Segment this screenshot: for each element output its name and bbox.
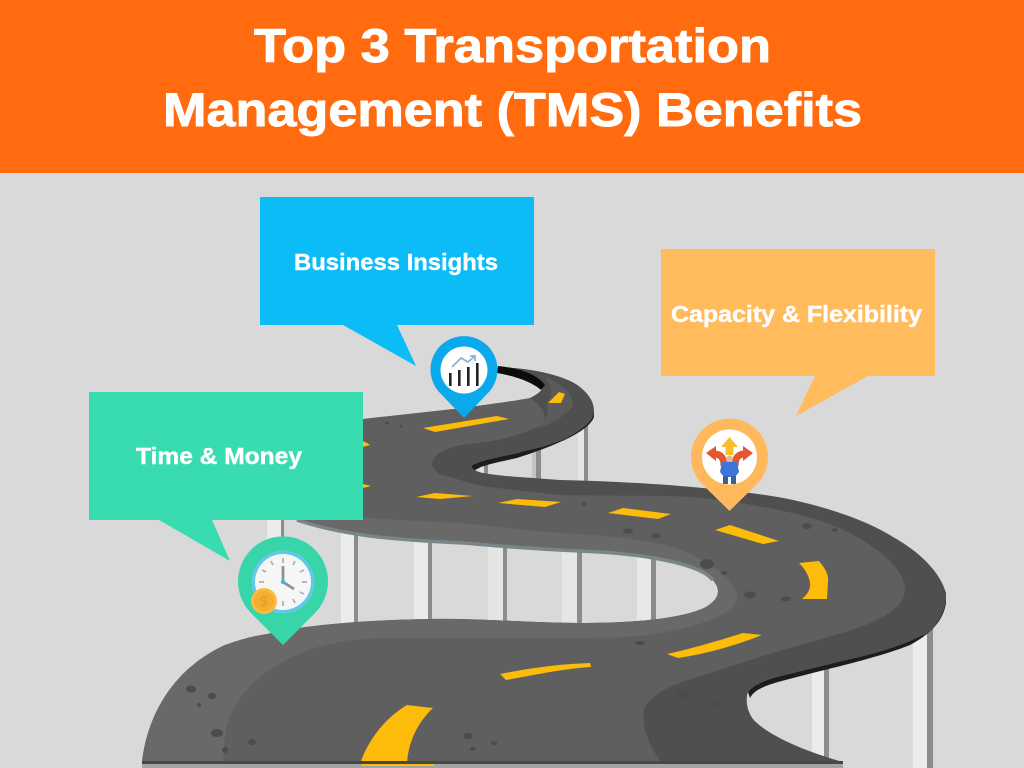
road base lower strip <box>142 764 843 768</box>
title: Management (TMS) Benefits <box>163 83 862 136</box>
light road rim <box>142 517 737 761</box>
road surface, dark shoulder <box>142 367 946 762</box>
road underside shadow <box>471 411 946 698</box>
callout: Time & Money: Time & Money <box>136 443 302 469</box>
road surface speckles <box>186 422 838 753</box>
pin: time and money clock: $ <box>260 593 268 609</box>
pin: capacity and flexibility <box>691 419 768 511</box>
title <box>163 19 862 136</box>
yellow lane markings <box>360 392 828 768</box>
winding road <box>130 366 946 768</box>
callout: Time & Money <box>89 392 363 561</box>
pin: time and money clock <box>238 536 328 645</box>
lobe highlight <box>538 377 573 428</box>
road base edge <box>142 761 843 764</box>
callout: Capacity & Flexibility <box>661 249 935 416</box>
road support pillars <box>267 420 933 768</box>
callout: Business Insights: Business Insights <box>294 249 498 275</box>
inner black edge of lobe <box>497 366 545 390</box>
lane marking under base <box>362 764 434 766</box>
road centre surface <box>224 398 905 765</box>
title: Top 3 Transportation <box>254 19 771 72</box>
hole edge highlight <box>297 520 713 580</box>
callout: Business Insights <box>260 197 534 366</box>
callout: Capacity & Flexibility: Capacity & Flexibility <box>671 301 922 327</box>
header banner <box>0 0 1024 173</box>
pin: business insights chart <box>430 336 497 418</box>
